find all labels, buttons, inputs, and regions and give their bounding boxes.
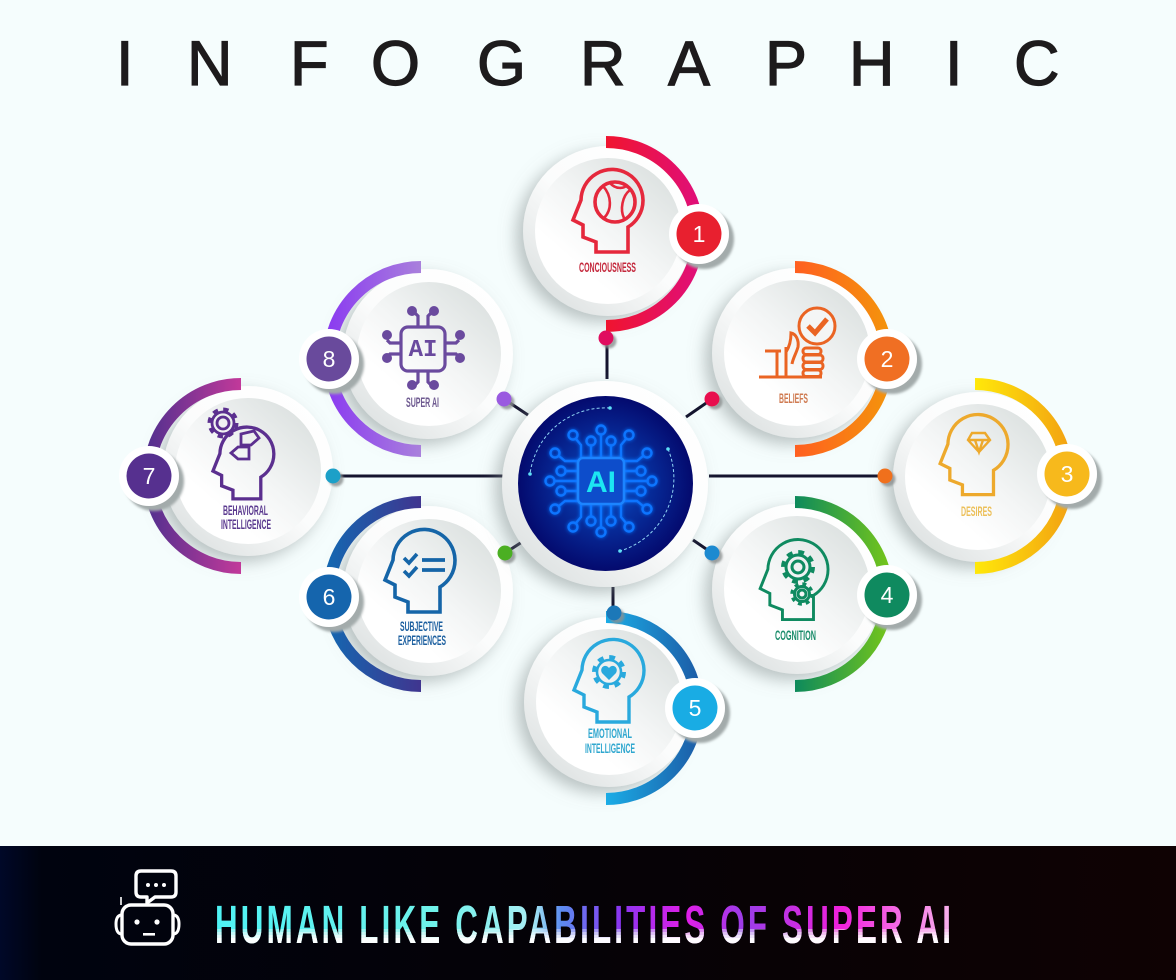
panel: 2 beliefs [712,267,917,451]
badge 1 [669,204,729,264]
badge 8 [299,329,359,389]
badge 6: 6 [323,584,335,610]
panel: 1 conciousness [523,142,729,326]
icon: head with gears [760,540,828,620]
icon: thumbs up with check [759,308,835,377]
icon: AI chip circuit [546,426,656,536]
badge 1: 1 [693,221,705,247]
badge 8: 8 [323,346,335,372]
icon: robot with speech bubble [116,871,179,944]
badge 6 [299,567,359,627]
label: DESIRES [961,503,992,519]
label: INTELLIGENCE [221,517,271,532]
label: SUBJECTIVE [400,619,443,634]
connector dots [326,330,892,620]
panel: 6 subjective experiences [299,502,513,686]
badge 2: 2 [881,346,893,372]
label: BEHAVIORAL [223,503,268,518]
label: INTELLIGENCE [585,741,635,756]
label [585,726,635,756]
panel: 5 emotional intelligence [524,617,725,799]
connector lines [333,340,885,612]
panel: 4 cognition [712,502,917,686]
dashed orbit arcs [528,406,674,553]
icon: head with ball [573,169,643,252]
badge 2 [857,329,917,389]
banner [0,846,1176,980]
icon: AI chip [382,306,465,390]
panel: 2 beliefs: BELIEFS [779,390,808,406]
label: CONCIOUSNESS [579,259,636,275]
icon: head with heart gear [574,639,644,722]
badge 5: 5 [689,695,701,721]
icon: head with gear and signpost [210,410,274,499]
panel: 7 behavioral intelligence [119,384,333,568]
icon: head with checklist [385,529,455,612]
icon: head with diamond [940,415,1008,495]
title: INFOGRAPHIC [116,29,1060,99]
badge 7: 7 [143,463,155,489]
panel: 3 desires [893,384,1097,568]
badge 5 [665,678,725,738]
badge 3: 3 [1061,461,1073,487]
label: COGNITION [775,627,816,643]
icon: AI chip circuit: AI [586,466,616,499]
badge 7 [119,446,179,506]
banner heading: HUMAN LIKE CAPABILITIES OF SUPER AI [215,895,951,955]
badge 3 [1037,444,1097,504]
badge 4 [857,565,917,625]
label [221,503,271,532]
label: SUPER AI [406,394,439,410]
badge 4: 4 [881,582,894,608]
panel: central AI hub [502,381,708,587]
panel: 6 subjective experiences: EXPERIENCES [398,633,446,648]
label [398,619,446,648]
panel: 8 super AI [299,267,513,451]
icon: AI chip: AI [409,337,437,364]
label: EMOTIONAL [588,726,632,741]
